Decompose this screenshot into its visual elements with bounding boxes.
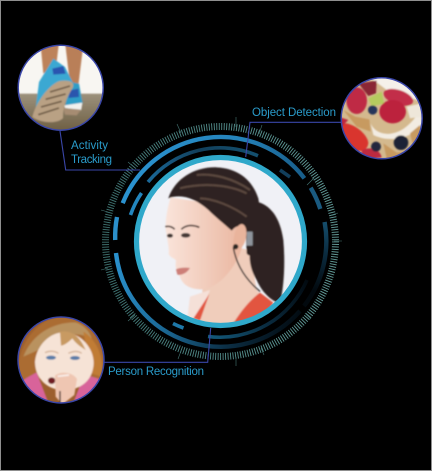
photo: running shoes [18,46,102,130]
hair [168,167,260,256]
earpiece device [247,232,253,246]
photo: cereal and berries [342,78,422,158]
portrait ring [136,158,304,326]
label: object detection: Object Detection [252,107,336,119]
inner ring segments [148,148,258,182]
eyes [46,356,56,360]
front shoe upper [35,58,74,107]
long tick marks [101,117,342,366]
portrait photo: woman in profile [139,160,302,323]
connector: person recognition [104,328,211,362]
connector: object detection [246,122,342,157]
strawberry [342,123,368,151]
tick ring [106,126,336,356]
red top [193,293,273,323]
hair [18,317,105,378]
raspberries [346,87,367,114]
person recognition node [15,315,107,407]
ear [233,224,246,250]
central portrait [130,150,310,330]
mouth [48,377,55,384]
label: activity tracking: Activity [71,140,108,152]
blueberries [394,135,408,150]
kiwi [368,92,384,107]
back shoe [65,82,83,107]
photo: smiling girl [18,318,104,402]
milk [370,78,418,101]
brow and eyes [165,226,199,229]
ponytail [250,202,284,303]
connector lines [60,122,342,362]
pink top [23,372,99,400]
ground [19,92,102,130]
face [166,197,247,289]
spoon [370,116,422,140]
bangs [60,331,86,350]
legs [40,42,59,74]
neck and shoulders [200,248,260,323]
sole [32,81,73,122]
radial gauge rings [101,117,342,366]
dark fruit [358,81,377,96]
lips [176,268,190,275]
object detection node [338,76,427,160]
connector: activity tracking [60,131,140,170]
activity tracking node [17,44,104,131]
outer ring segments [123,137,304,203]
cereal flakes [343,110,422,158]
label: tracking: Tracking [71,154,112,166]
face [35,332,94,390]
label: person recognition: Person Recognition [108,366,204,378]
hands [55,373,77,404]
